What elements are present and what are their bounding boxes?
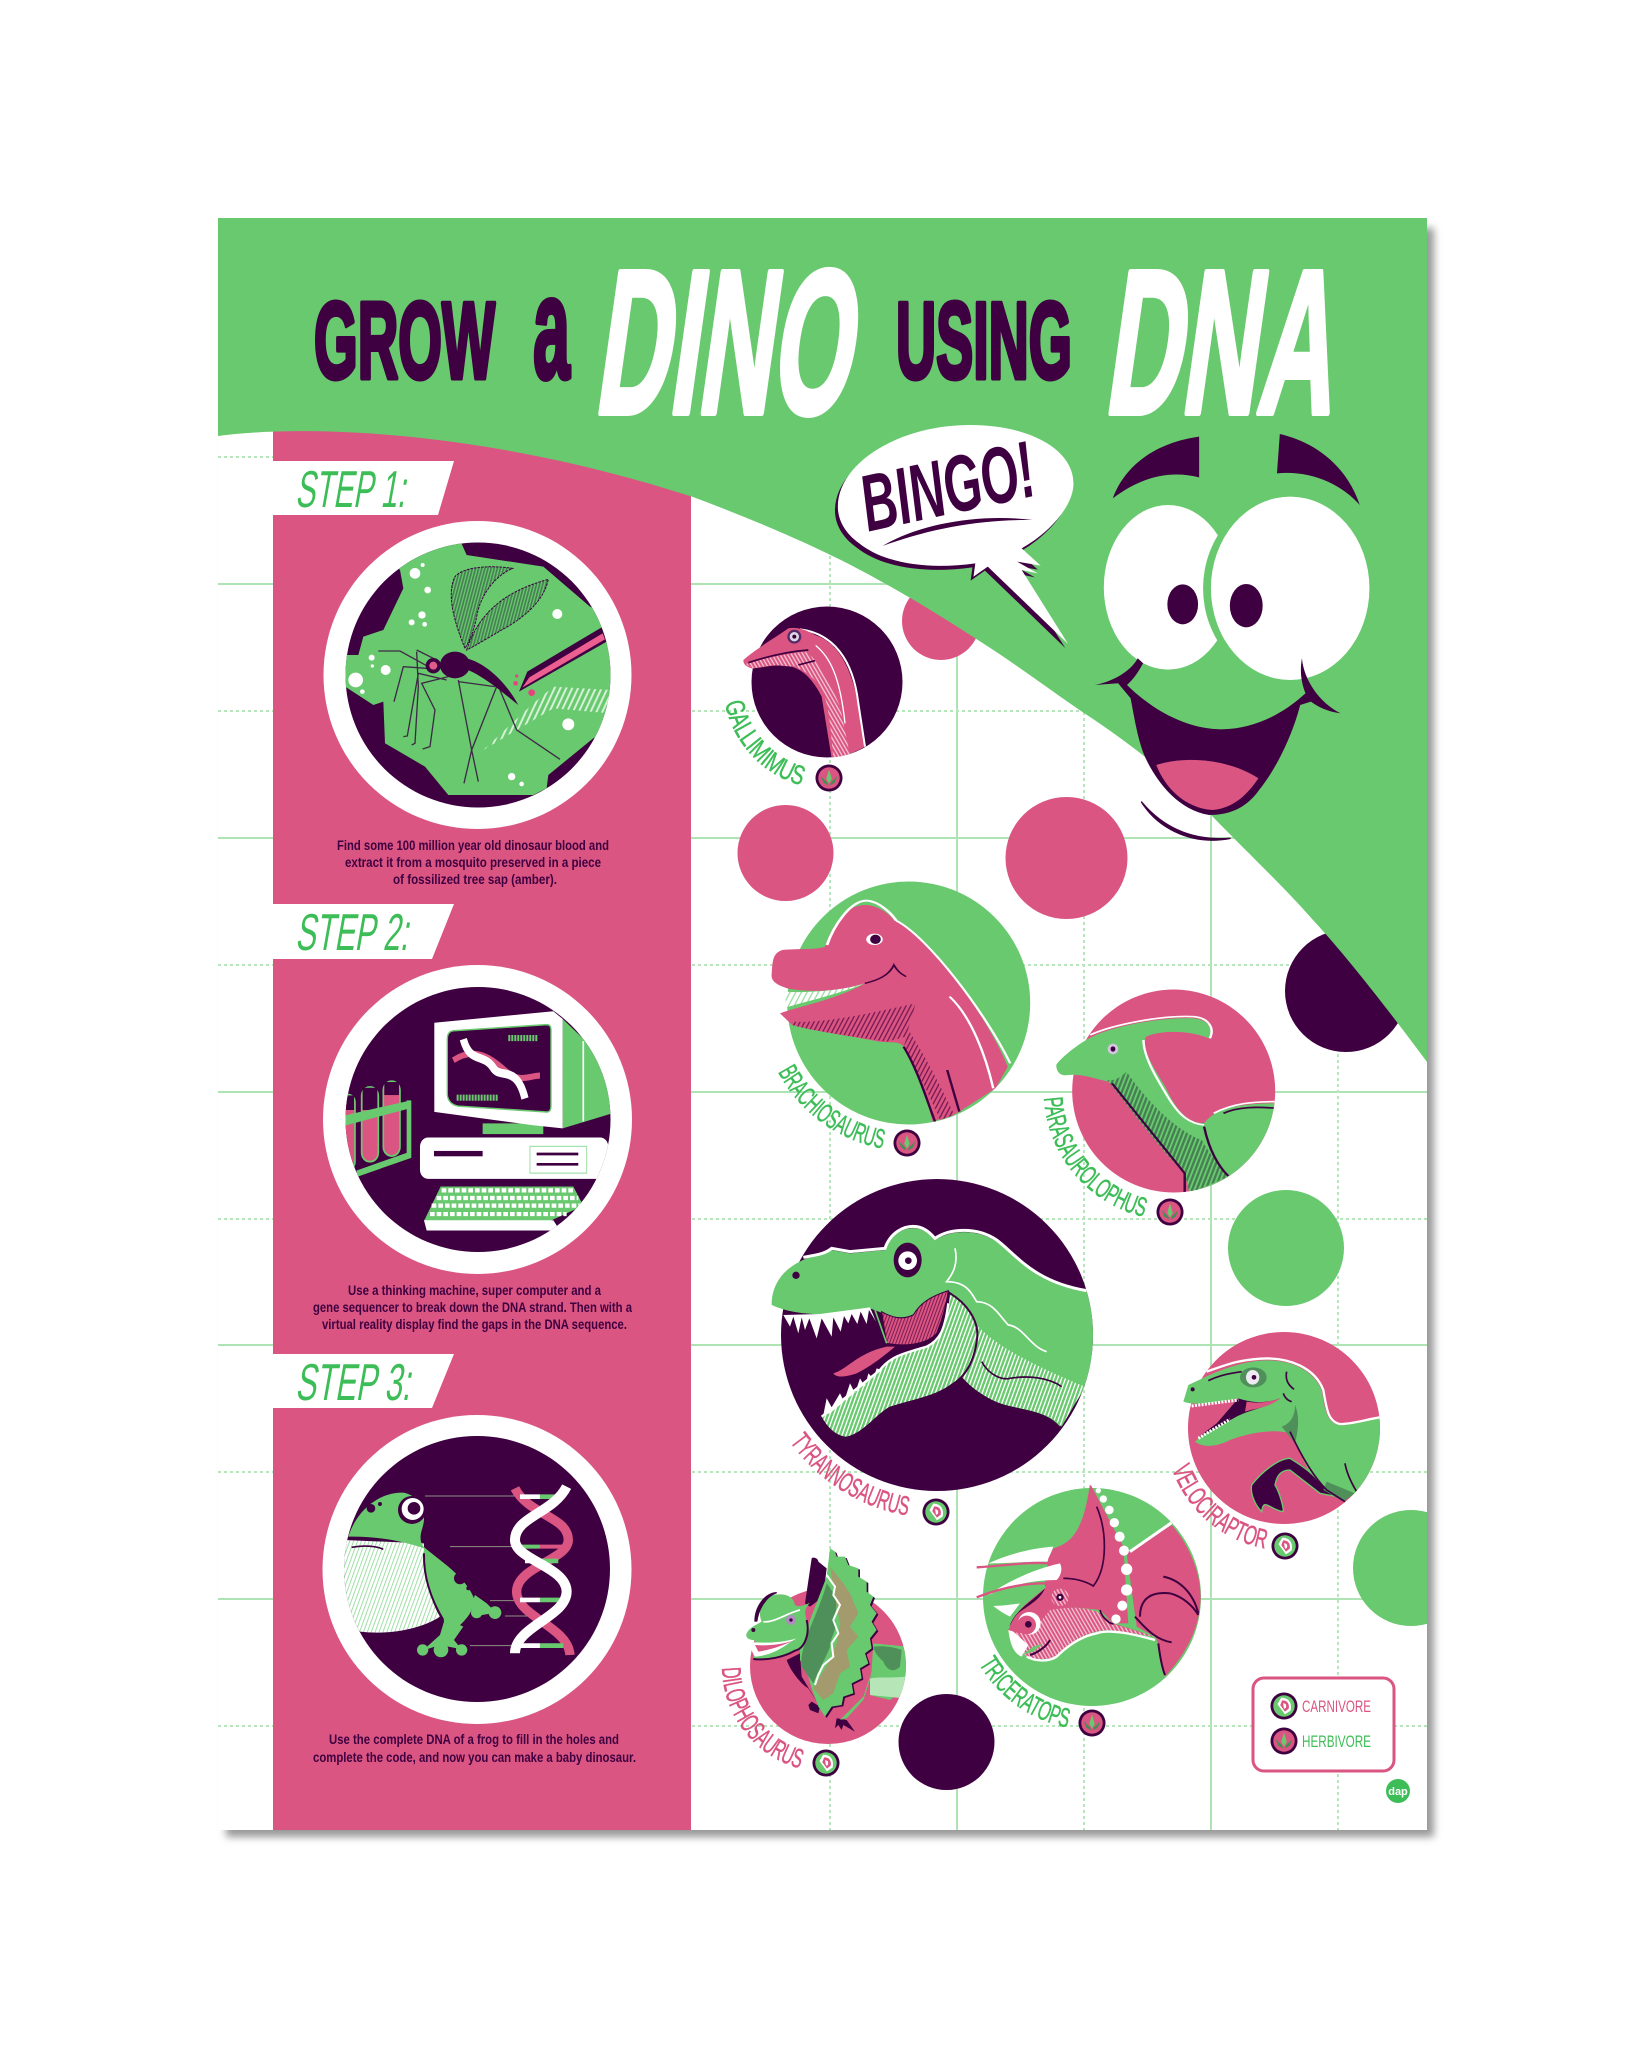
dinosaur: tyrannosaurus <box>772 1179 1093 1526</box>
dinosaur: triceratops <box>976 1484 1201 1736</box>
dinosaur: velociraptor <box>1173 1332 1380 1560</box>
badge <box>815 764 843 792</box>
banner: step 1 <box>218 461 454 519</box>
label: TRICERATOPS <box>980 1654 1070 1728</box>
label: VELOCIRAPTOR <box>1173 1462 1268 1549</box>
badge <box>1156 1198 1184 1226</box>
label: PARASAUROLOPHUS <box>1044 1097 1147 1216</box>
legend herbivore: HERBIVORE <box>1302 1732 1371 1751</box>
title <box>314 228 1357 457</box>
step 1 caption: Find some 100 million year old dinosaur blood and <box>337 838 609 853</box>
logo: dap: dap <box>1388 1786 1408 1798</box>
background grid <box>218 400 1432 1830</box>
eyebrows <box>1113 434 1360 505</box>
banner: step 3 <box>218 1354 454 1412</box>
step 2 caption: Use a thinking machine, super computer and a <box>348 1283 601 1298</box>
step 2 caption: virtual reality display find the gaps in the DNA sequence. <box>322 1317 627 1332</box>
title: DINO <box>587 228 875 457</box>
step 1 caption: of fossilized tree sap (amber). <box>393 872 557 887</box>
step 1 illustration: mosquito in amber <box>324 521 632 829</box>
step 2 caption: gene sequencer to break down the DNA strand. Then with a <box>313 1300 632 1315</box>
title: USING <box>896 280 1072 402</box>
step 3 caption: complete the code, and now you can make a baby dinosaur. <box>313 1750 636 1765</box>
poster background <box>218 218 1427 1830</box>
speech bubble: bingo <box>835 425 1073 648</box>
badge <box>812 1749 840 1777</box>
title: GROW <box>314 280 495 402</box>
legend herbivore <box>1270 1727 1371 1755</box>
legend carnivore: CARNIVORE <box>1302 1697 1371 1716</box>
mouth <box>1095 658 1341 840</box>
label: DILOPHOSAURUS <box>722 1668 804 1768</box>
speech bubble: bingo: BINGO! <box>851 425 1044 548</box>
badge <box>893 1129 921 1157</box>
step 3 caption: Use the complete DNA of a frog to fill in the holes and <box>329 1732 619 1747</box>
dinosaur: gallimimus <box>726 606 902 792</box>
panel: steps column <box>273 400 691 1830</box>
title: DNA <box>1097 228 1357 457</box>
step 1 caption <box>337 838 609 887</box>
banner: step 2: STEP 2: <box>293 904 416 962</box>
legend carnivore <box>1270 1692 1371 1720</box>
banner: step 1: STEP 1: <box>293 461 413 519</box>
green header swoosh <box>218 218 1427 1062</box>
character face <box>1095 434 1377 840</box>
label: TYRANNOSAURUS <box>792 1430 910 1516</box>
dinosaur: dilophosaurus <box>722 1548 906 1776</box>
banner: step 2 <box>218 904 454 962</box>
label: BRACHIOSAURUS <box>778 1064 885 1148</box>
step 2 caption <box>313 1283 632 1332</box>
legend <box>1253 1678 1394 1771</box>
step 1 caption: extract it from a mosquito preserved in a piece <box>345 855 601 870</box>
badge <box>1271 1532 1299 1560</box>
step 3 caption <box>313 1732 636 1765</box>
title: a <box>533 246 571 409</box>
eyes <box>1104 493 1377 683</box>
decorative dots <box>738 582 1469 1790</box>
banner: step 3: STEP 3: <box>293 1354 418 1412</box>
badge <box>922 1498 950 1526</box>
label: GALLIMIMUS <box>726 700 805 784</box>
poster shadow <box>226 228 1434 1837</box>
step 2 illustration: computer and test tubes <box>323 965 632 1274</box>
logo: dap <box>1386 1779 1410 1803</box>
badge <box>1078 1709 1106 1737</box>
step 3 illustration: frog and dna <box>322 1415 632 1724</box>
dinosaur: parasaurolophus <box>1044 990 1276 1226</box>
dinosaur: brachiosaurus <box>772 882 1030 1156</box>
